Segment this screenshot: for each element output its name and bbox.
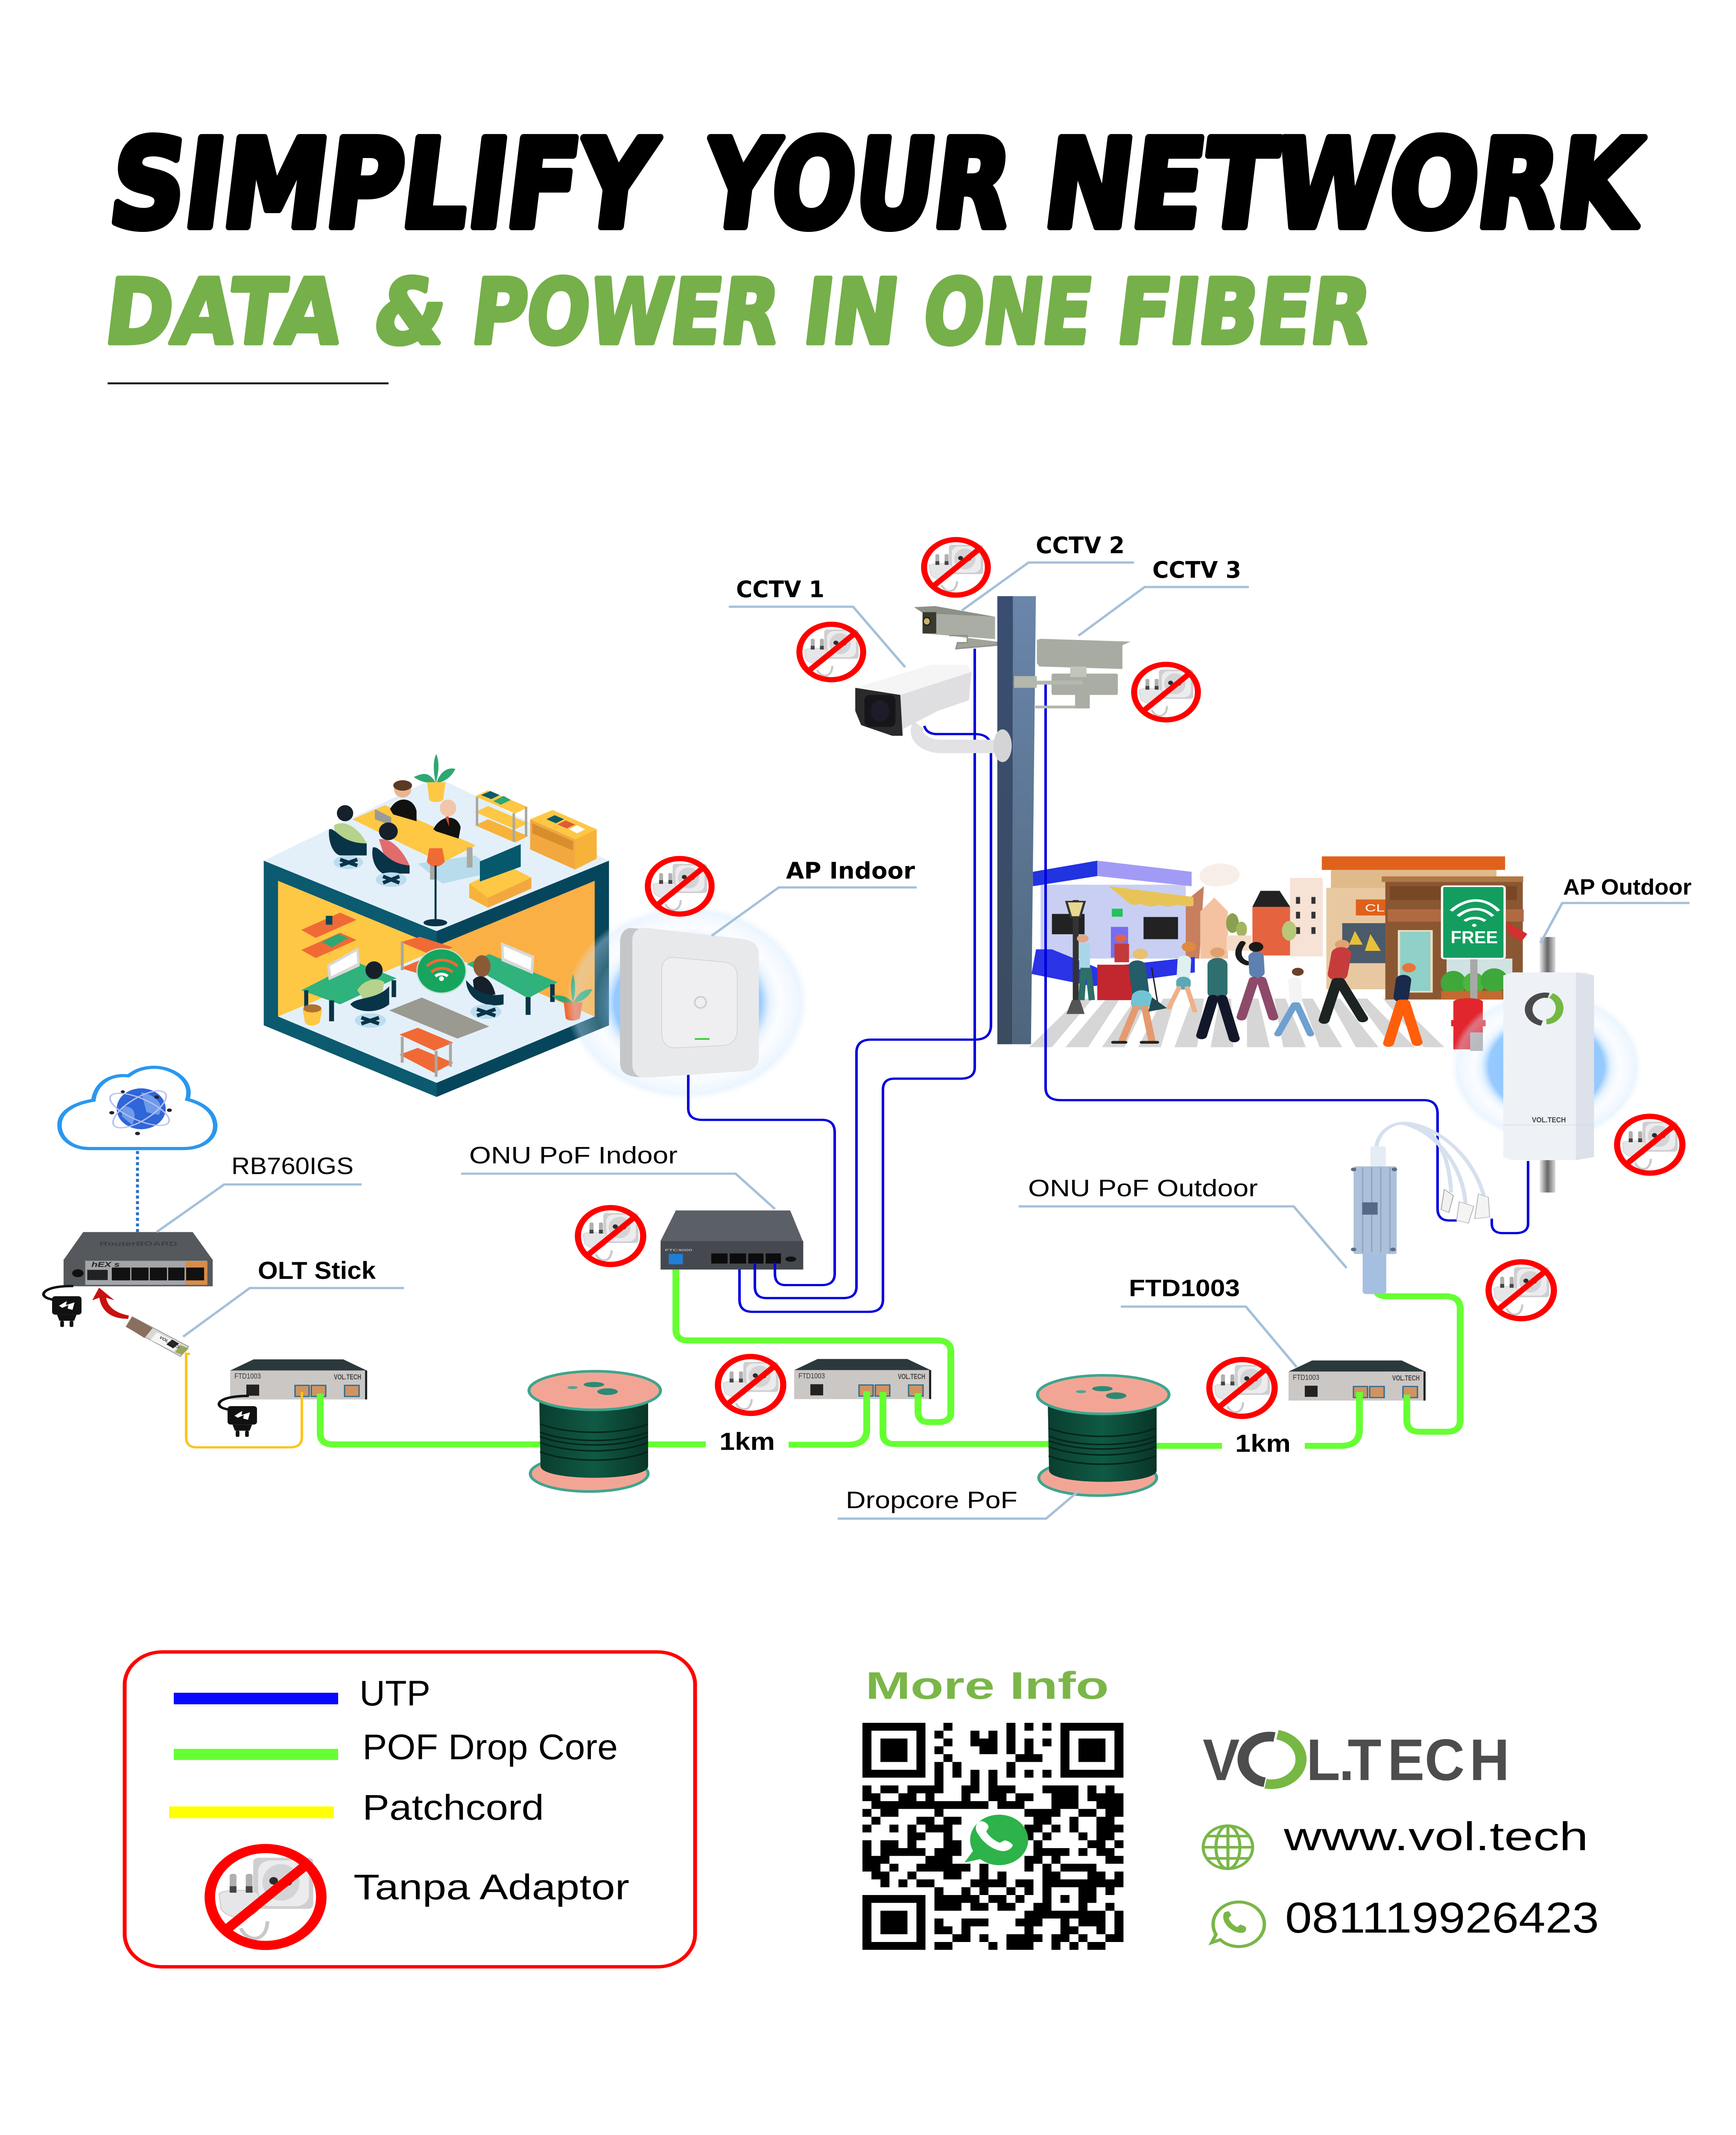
title: YOUR: [695, 114, 1019, 255]
cables: POF drop core green lines: [320, 1269, 1460, 1446]
label: ONU PoF Indoor: ONU PoF Indoor: [469, 1142, 678, 1168]
subtitle: POWER: [467, 260, 785, 364]
device: AP outdoor: VOL.TECH: [1532, 1115, 1566, 1124]
device: CCTV 1 camera: [855, 665, 1012, 762]
label: FTD1003: FTD1003: [1129, 1275, 1240, 1301]
heading: More Info: More Info: [865, 1664, 1109, 1707]
subtitle: [100, 260, 1377, 364]
device: OLT stick SFP: VOL.TECH: [158, 1336, 183, 1350]
device: FTD1003 middle: [794, 1359, 931, 1399]
icon: globe: [1203, 1826, 1253, 1869]
icon: router power adapter: [44, 1286, 82, 1327]
blue kiosk: [1032, 861, 1195, 1014]
icon: no adaptor ONU outdoor: [1488, 1262, 1554, 1319]
icon: AP indoor signal glow: [566, 904, 809, 1101]
icon: FTD power adapter: [219, 1396, 257, 1437]
device: FTD1003 right: [1289, 1360, 1426, 1401]
device: FTD1003 left: [230, 1359, 367, 1399]
icon: whatsapp outline: [1212, 1902, 1264, 1947]
upper-floor furniture and people: [329, 754, 597, 926]
legend: Tanpa Adaptor: [210, 1848, 629, 1945]
icon: no adaptor CCTV 3: [1134, 664, 1198, 720]
title: SIMPLIFY: [103, 114, 663, 255]
device: dropcore spool left: [529, 1371, 660, 1492]
QR code: [862, 1723, 1123, 1950]
label: AP Indoor: AP Indoor: [786, 857, 915, 884]
pole: [997, 596, 1036, 1044]
label: CCTV 3: CCTV 3: [1152, 556, 1241, 583]
subtitle: DATA: [100, 260, 347, 364]
label: ONU PoF Outdoor: ONU PoF Outdoor: [1028, 1175, 1258, 1202]
legend: Tanpa Adaptor: Tanpa Adaptor: [354, 1868, 629, 1907]
device: RB760IGS router: hEX s: [91, 1261, 120, 1269]
contact: website: www.vol.tech: [1283, 1814, 1588, 1859]
device: dropcore spool right: [1038, 1375, 1169, 1496]
subtitle: ONE: [918, 260, 1098, 364]
icon: no adaptor CCTV 1: [799, 624, 863, 680]
title: [103, 114, 1652, 255]
cables: UTP blue lines: [688, 649, 1528, 1312]
brown storefront: [1322, 857, 1527, 1000]
device: AP outdoor: [1503, 937, 1594, 1193]
subtitle: IN: [798, 260, 904, 364]
icon: no adaptor FTD middle: [718, 1357, 783, 1413]
label: CCTV 2: CCTV 2: [1036, 532, 1125, 559]
device: RB760IGS router: [64, 1232, 213, 1286]
icon: no adaptor AP outdoor: [1617, 1116, 1682, 1173]
cable: patchcord yellow: [186, 1354, 302, 1448]
icon: WhatsApp logo in QR: [964, 1815, 1028, 1865]
label: 1km left: 1km: [719, 1428, 775, 1456]
leader lines: [157, 562, 1689, 1519]
legend: POF Drop Core: POF Drop Core: [362, 1728, 618, 1767]
icon: no adaptor ONU indoor: [578, 1208, 643, 1264]
subtitle: FIBER: [1112, 260, 1377, 364]
logo: VOL.TECH: VOL.TECH: [1203, 1727, 1509, 1793]
icon: AP outdoor signal glow: [1450, 990, 1642, 1143]
device: ONU PoF indoor: FTC3000: [665, 1248, 693, 1252]
label: AP Outdoor: AP Outdoor: [1563, 874, 1692, 899]
crosswalk: [1029, 999, 1444, 1047]
wifi free sign: FREE: [1451, 927, 1498, 947]
background town houses: [1181, 863, 1323, 959]
device: CCTV 3 camera: [1014, 639, 1131, 708]
legend: POF Drop Core: [174, 1728, 618, 1767]
legend: Patchcord: Patchcord: [362, 1788, 544, 1828]
device: OLT stick SFP: [126, 1317, 189, 1357]
label: OLT Stick: OLT Stick: [258, 1257, 376, 1284]
label: 1km right: 1km: [1235, 1430, 1291, 1457]
device: RB760IGS router: RouterBOARD: [99, 1240, 177, 1247]
legend: UTP: [174, 1674, 430, 1713]
lower-floor furniture and people: [301, 912, 593, 1077]
device: CCTV 2 camera: [914, 606, 997, 649]
device: AP indoor: [620, 928, 759, 1078]
arrow: SFP into router: [92, 1288, 129, 1319]
pedestrians: [1113, 940, 1417, 1043]
legend: UTP: UTP: [359, 1674, 430, 1713]
label: RB760IGS: RB760IGS: [231, 1152, 354, 1179]
panel: street scene: [1029, 857, 1527, 1051]
icon: internet cloud: [59, 1068, 215, 1149]
device: ONU PoF outdoor: [1351, 1123, 1490, 1294]
label: Dropcore PoF: Dropcore PoF: [846, 1487, 1017, 1513]
connector: internet dotted link: [136, 1151, 139, 1232]
brown storefront: CLO: [1365, 902, 1397, 914]
subtitle: &: [368, 260, 452, 364]
contact: phone number: 081119926423: [1285, 1894, 1599, 1942]
icon: no adaptor CCTV 2: [924, 540, 988, 595]
panel: legend: [125, 1652, 695, 1967]
wifi free sign: [1442, 886, 1505, 1051]
icon: no adaptor AP indoor: [648, 859, 712, 914]
icon: no adaptor FTD right: [1209, 1360, 1275, 1416]
legend: Patchcord: [169, 1788, 544, 1828]
panel: indoor office building: [264, 754, 609, 1097]
label: CCTV 1: CCTV 1: [736, 576, 824, 602]
title underline: [108, 383, 389, 384]
device: ONU PoF indoor: [660, 1211, 803, 1269]
